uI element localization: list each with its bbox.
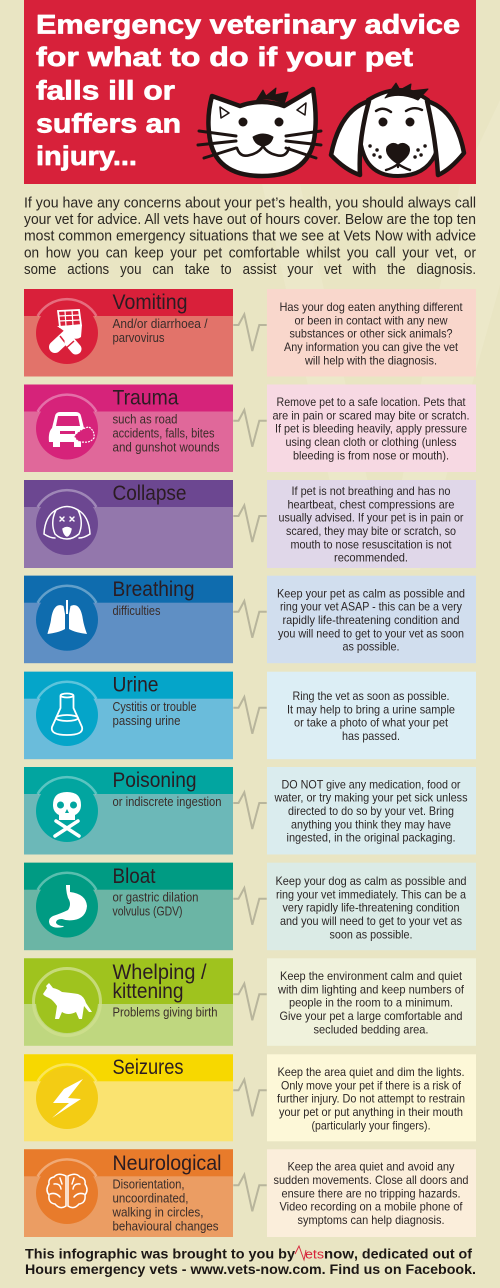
panel: neurological xyxy=(24,1149,233,1237)
panel: trauma advice: using clean cloth or clothing (unless xyxy=(286,435,456,449)
panel: breathing advice: Keep your pet as calm as possible and xyxy=(277,586,465,600)
heading: Seizures xyxy=(112,1055,184,1079)
arrow: pulse connector xyxy=(233,1080,267,1116)
panel: seizures advice xyxy=(267,1054,476,1141)
panel: poisoning advice: directed to do so by your vet. Bring xyxy=(288,804,454,818)
panel: vomiting xyxy=(24,289,233,376)
panel: neurological advice: Keep the area quiet and avoid any xyxy=(288,1160,454,1174)
panel: whelping advice xyxy=(267,958,476,1046)
logo: vets now: now xyxy=(324,1245,354,1261)
panel: urine xyxy=(24,672,233,759)
panel: breathing advice: ring your vet ASAP - this can be a very xyxy=(280,600,462,614)
title: suffers an xyxy=(36,109,181,139)
heading: Neurological xyxy=(112,1151,222,1175)
subtitle xyxy=(112,891,199,918)
footer credit xyxy=(25,1245,476,1277)
subtitle: volvulus (GDV) xyxy=(112,904,182,918)
panel: trauma advice: Remove pet to a safe location. Pets that xyxy=(276,395,466,409)
title: Emergency veterinary advice xyxy=(36,10,460,40)
panel: poisoning advice: water, or try making your pet sick unless xyxy=(274,791,468,805)
panel: neurological advice xyxy=(267,1149,476,1237)
heading: Poisoning xyxy=(112,768,196,792)
subtitle: difficulties xyxy=(112,604,160,618)
icon: lungs xyxy=(48,600,87,634)
intro text: If you have any concerns about your pet’s health, you should always call xyxy=(24,196,476,212)
subtitle xyxy=(112,413,220,454)
panel: poisoning xyxy=(24,767,233,854)
arrow: pulse connector xyxy=(233,314,267,351)
arrow: pulse connector xyxy=(233,888,267,925)
panel: bloat advice: soon as possible. xyxy=(330,927,412,941)
panel: urine advice: has passed. xyxy=(342,729,400,743)
panel: urine advice: It may help to bring a urine sample xyxy=(287,702,455,716)
panel: poisoning advice xyxy=(267,767,476,854)
panel: collapse advice: mouth to nose resuscitation is not xyxy=(290,537,452,551)
icon: brain xyxy=(47,1174,87,1208)
title: falls ill or xyxy=(36,76,175,106)
subtitle: And/or diarrhoea / xyxy=(112,317,208,331)
icon: stomach xyxy=(49,885,87,928)
panel: bloat xyxy=(24,863,233,950)
arrow: pulse connector xyxy=(233,792,267,829)
panel: vomiting advice: Has your dog eaten anything different xyxy=(280,300,463,314)
subtitle: walking in circles, xyxy=(112,1206,204,1220)
heading: kittening xyxy=(112,979,184,1003)
icon: flask xyxy=(52,694,82,735)
heading: Trauma xyxy=(112,385,179,409)
subtitle xyxy=(112,700,197,728)
panel: collapse advice: If pet is not breathing and has no xyxy=(292,484,451,498)
footer credit: Hours emergency vets - www.vets-now.com. Find us on Facebook. xyxy=(25,1261,476,1277)
panel: trauma advice: bleeding is from nose or mouth). xyxy=(293,448,449,462)
panel: breathing xyxy=(24,576,233,663)
subtitle: accidents, falls, bites xyxy=(112,426,214,440)
panel: collapse advice: heartbeat, chest compressions are xyxy=(288,497,455,511)
panel: vomiting advice xyxy=(267,289,476,376)
logo: vets now: ets xyxy=(305,1246,325,1261)
subtitle: such as road xyxy=(112,413,178,427)
panel: collapse advice: scared, they may bite or scratch, so xyxy=(286,524,456,538)
panel: vomiting advice: Any information you can give the vet xyxy=(284,340,459,354)
footer credit: This infographic was brought to you by xyxy=(25,1245,295,1261)
panel: bloat advice xyxy=(267,863,476,950)
panel: breathing advice: rapidly life-threatening condition and xyxy=(282,613,460,627)
panel: whelping advice: secluded bedding area. xyxy=(314,1022,428,1036)
subtitle: behavioural changes xyxy=(112,1220,218,1234)
panel: seizures advice: further injury. Do not attempt to restrain xyxy=(277,1092,465,1106)
intro text: on how you can keep your pet comfortable whilst you call your vet, or xyxy=(24,245,476,261)
panel: breathing advice xyxy=(267,576,476,663)
arrow: pulse connector xyxy=(233,697,267,734)
panel: bloat advice: and you will need to get to your vet as xyxy=(280,914,462,928)
subtitle: parvovirus xyxy=(112,331,164,345)
panel: whelping advice: Give your pet a large comfortable and xyxy=(280,1009,462,1023)
panel: seizures advice: (particularly your fingers). xyxy=(312,1118,430,1132)
intro text: most common emergency situations that we see at Vets Now with advice xyxy=(24,229,476,245)
panel: vomiting advice: will help with the diagnosis. xyxy=(304,353,437,367)
panel: bloat advice: very rapidly life-threatening condition xyxy=(282,901,460,915)
heading: Bloat xyxy=(112,864,156,888)
heading: Whelping / xyxy=(112,960,207,984)
footer credit: , dedicated out of xyxy=(354,1245,472,1261)
panel: whelping advice: Keep the environment calm and quiet xyxy=(280,969,463,983)
panel: neurological advice: symptoms can help diagnosis. xyxy=(298,1213,444,1227)
heading: Vomiting xyxy=(112,290,188,314)
heading: Collapse xyxy=(112,481,186,505)
title: injury... xyxy=(36,141,137,171)
panel: urine advice xyxy=(267,672,476,759)
logo: vets now xyxy=(295,1245,354,1261)
panel: neurological advice: sudden movements. Close all doors and xyxy=(274,1173,468,1187)
arrow: pulse connector xyxy=(233,505,267,542)
arrow: pulse connector xyxy=(233,1175,267,1211)
icon: car crash xyxy=(49,412,94,447)
panel: seizures advice: Only move your pet if there is a risk of xyxy=(281,1078,462,1092)
panel: collapse xyxy=(24,480,233,568)
icon: lightning bolt xyxy=(52,1079,83,1118)
panel: trauma advice: are in pain or scared may bite or scratch. xyxy=(272,408,470,422)
subtitle: or indiscrete ingestion xyxy=(112,795,222,809)
panel: collapse advice: recommended. xyxy=(334,551,408,565)
arrow: pulse connector xyxy=(233,410,267,447)
panel: urine advice: or take a photo of what your pet xyxy=(294,716,449,730)
subtitle xyxy=(112,317,208,345)
subtitle: Problems giving birth xyxy=(112,1006,218,1020)
icon: collapsed dog xyxy=(44,506,90,539)
icon: dog face xyxy=(331,83,464,176)
panel: collapse advice xyxy=(267,480,476,568)
title: for what to do if your pet xyxy=(36,42,413,72)
intro text xyxy=(24,196,476,278)
panel: trauma advice: If pet is bleeding heavily, apply pressure xyxy=(275,422,467,436)
panel: bloat advice: ring your vet immediately. This can be a xyxy=(276,887,466,901)
subtitle xyxy=(112,1178,218,1234)
panel: vomiting advice: or been in contact with any new xyxy=(294,313,448,327)
intro text: your vet for advice. All vets have out of hours cover. Below are the top ten xyxy=(24,212,476,228)
subtitle: Cystitis or trouble xyxy=(112,700,197,714)
icon: pregnant cat xyxy=(43,983,92,1019)
icon: skull and crossbones xyxy=(53,792,81,836)
panel: whelping / kittening xyxy=(24,958,233,1046)
panel: poisoning advice: anything you think they may have xyxy=(291,817,451,831)
arrow: pulse connector xyxy=(233,601,267,638)
subtitle: uncoordinated, xyxy=(112,1192,188,1206)
panel: trauma xyxy=(24,384,233,472)
panel: breathing advice: as possible. xyxy=(342,640,400,654)
icon: cat face xyxy=(198,88,321,176)
subtitle: Disorientation, xyxy=(112,1178,184,1192)
heading: Breathing xyxy=(112,577,194,601)
heading: Urine xyxy=(112,673,158,697)
subtitle: passing urine xyxy=(112,714,181,728)
panel: whelping advice: people in the room to a minimum. xyxy=(289,996,453,1010)
subtitle: and gunshot wounds xyxy=(112,440,220,454)
panel: poisoning advice: ingested, in the original packaging. xyxy=(286,831,456,845)
panel: seizures advice: your pet or put anything in their mouth xyxy=(279,1105,463,1119)
panel: urine advice: Ring the vet as soon as possible. xyxy=(292,689,450,703)
panel: neurological advice: Video recording on a mobile phone of xyxy=(280,1200,463,1214)
panel: seizures advice: Keep the area quiet and dim the lights. xyxy=(278,1065,464,1079)
header banner xyxy=(24,0,476,184)
panel: bloat advice: Keep your dog as calm as possible and xyxy=(276,874,466,888)
panel: poisoning advice: DO NOT give any medication, food or xyxy=(282,777,460,791)
icon: chocolate and pills xyxy=(55,310,82,350)
panel: trauma advice xyxy=(267,384,476,472)
panel: seizures xyxy=(24,1054,233,1141)
panel: whelping advice: with dim lighting and keep numbers of xyxy=(277,982,465,996)
panel: neurological advice: ensure there are no tripping hazards. xyxy=(282,1186,460,1200)
panel: breathing advice: you will need to get to your vet as soon xyxy=(278,626,464,640)
title xyxy=(36,10,460,171)
heading xyxy=(112,960,207,1003)
panel: collapse advice: usually advised. If your pet is in pain or xyxy=(278,511,464,525)
panel: vomiting advice: substances or other sick animals? xyxy=(290,327,453,341)
subtitle: or gastric dilation xyxy=(112,891,199,905)
arrow: pulse connector xyxy=(233,984,267,1020)
